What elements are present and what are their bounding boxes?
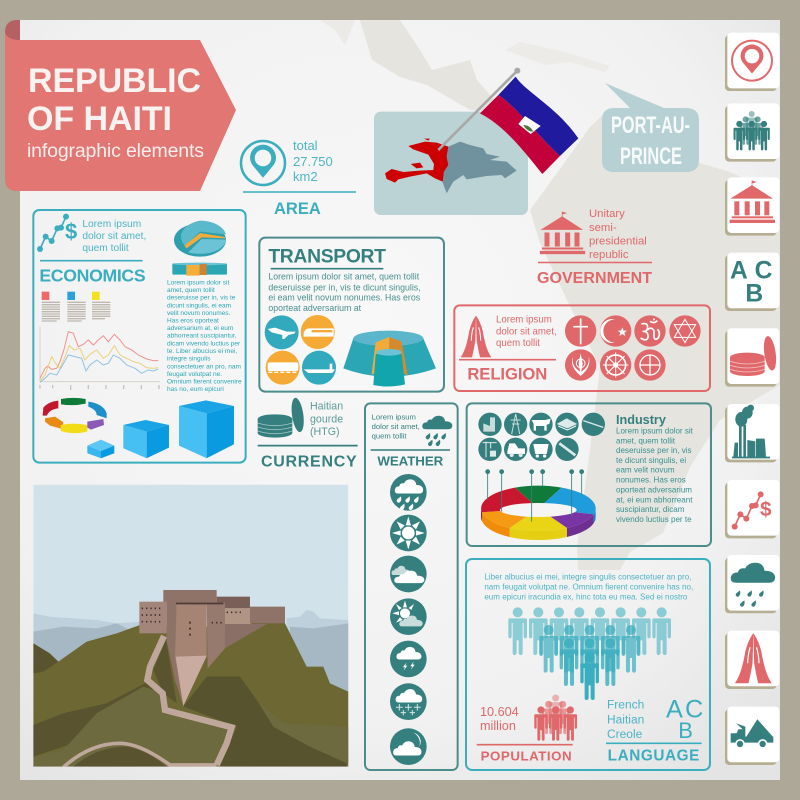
ribbon body bbox=[5, 32, 236, 191]
title ribbon bbox=[5, 20, 236, 191]
capital name: PORT-AU- bbox=[611, 112, 690, 139]
weather heading: WEATHER bbox=[377, 454, 444, 469]
weather intro text: Lorem ipsum bbox=[372, 412, 416, 421]
industry text: oporteat adversarium bbox=[616, 485, 692, 494]
ribbon curl bbox=[5, 20, 20, 48]
icon: cross bbox=[565, 315, 596, 347]
economics body text: deseruisse per in, vis te bbox=[167, 295, 236, 302]
icon: cloudy bbox=[390, 556, 427, 592]
tile: government bbox=[725, 177, 779, 236]
tile: religion bbox=[725, 631, 779, 689]
icon: crescent and star bbox=[600, 315, 631, 347]
economics heading: ECONOMICS bbox=[39, 266, 146, 286]
sidebar tiles, upper bbox=[725, 33, 779, 387]
icon: letters ABC: B bbox=[678, 718, 693, 743]
icon: tube bbox=[555, 438, 579, 461]
pie chart bbox=[174, 221, 226, 257]
icon: thunderstorm bbox=[390, 641, 427, 677]
icon: people group bbox=[534, 694, 577, 741]
government form: presidential bbox=[589, 236, 647, 248]
icon: loader bbox=[504, 438, 527, 461]
icon: plane bbox=[265, 315, 299, 349]
area value: total bbox=[293, 138, 318, 153]
cube chart bbox=[87, 400, 234, 458]
currency name: Haitian bbox=[310, 400, 343, 412]
population intro text: Liber albucius ei mei, integre singulis consectetuer an pro, bbox=[484, 572, 691, 581]
currency block bbox=[258, 397, 358, 471]
population intro text: eum epicuri iracundia ex, hinc tota eu mea. Sed ei nostro bbox=[484, 592, 688, 601]
population value: 10.604 bbox=[480, 705, 519, 719]
religion intro text: dolor sit amet, bbox=[496, 327, 557, 338]
languages: Creole bbox=[607, 727, 643, 741]
population heading: POPULATION bbox=[481, 749, 572, 764]
capital callout bbox=[602, 83, 699, 172]
transport text: ei eam velit novum nonumes. Has eros bbox=[268, 293, 421, 303]
landmark illustration: Citadelle Laferriere bbox=[33, 485, 348, 767]
economics body text: dicam vivendo luctius per bbox=[167, 340, 241, 347]
panel: weather bbox=[365, 403, 458, 770]
industry text: te dicunt singulis, ei bbox=[616, 456, 686, 465]
icon: rain cloud bbox=[422, 416, 452, 446]
currency name: gourde bbox=[310, 413, 343, 425]
ring chart bbox=[43, 398, 107, 433]
economics body text: has no, eum epicuri bbox=[167, 386, 224, 393]
panel: economics bbox=[33, 210, 246, 463]
ring chart bbox=[481, 486, 596, 540]
icon: sun bbox=[390, 515, 427, 551]
government heading: GOVERNMENT bbox=[537, 270, 652, 287]
title ribbon: OF HAITI bbox=[27, 100, 172, 138]
cylinder chart bbox=[172, 263, 227, 276]
transport text: oporteat adversarium at bbox=[268, 303, 362, 313]
economics body text: velit novum nonumes. bbox=[167, 310, 231, 317]
icon: star of David bbox=[669, 315, 701, 347]
population value: million bbox=[480, 719, 516, 733]
transport text: deseruisse per in, vis te dicunt singulis, bbox=[268, 282, 421, 292]
languages: Haitian bbox=[607, 712, 644, 726]
icon: coins bbox=[258, 397, 306, 438]
transport text: Lorem ipsum dolor sit amet, quem tollit bbox=[268, 272, 420, 282]
tile: language: C bbox=[755, 258, 773, 285]
tile: area bbox=[725, 33, 779, 91]
people pictogram bbox=[508, 607, 671, 700]
economics intro text: quem tollit bbox=[82, 243, 129, 254]
panel: industry bbox=[467, 403, 711, 546]
flagpole bbox=[438, 68, 520, 150]
economics body text: adversarium at, ei eum bbox=[167, 325, 233, 332]
chart legend bbox=[42, 292, 110, 321]
economics body text: te. Liber albucius ei mei, bbox=[167, 348, 237, 355]
line chart bbox=[40, 327, 160, 390]
tile: currency bbox=[725, 328, 779, 387]
chart pins bbox=[486, 470, 584, 522]
government block bbox=[537, 208, 652, 287]
icon: train bbox=[266, 351, 300, 385]
tile: language: A bbox=[730, 258, 748, 285]
icon: fabric bbox=[555, 413, 579, 436]
icon: ship bbox=[302, 351, 336, 385]
industry text: suscipiantur, dicam bbox=[616, 505, 685, 514]
tile: industry bbox=[725, 404, 779, 462]
currency name: (HTG) bbox=[310, 426, 340, 438]
area heading: AREA bbox=[274, 200, 321, 218]
tile: transport bbox=[725, 707, 779, 765]
transport heading: TRANSPORT bbox=[268, 247, 386, 268]
currency heading: CURRENCY bbox=[261, 454, 357, 471]
economics body text: feugait volutpat ne. bbox=[167, 371, 222, 378]
religion intro text: Lorem ipsum bbox=[496, 314, 552, 325]
religion intro text: quem tollit bbox=[496, 338, 540, 349]
icon: snow bbox=[390, 683, 427, 720]
economics body text: Omnium fierent convenire bbox=[167, 379, 242, 386]
icon: khanda bbox=[565, 349, 596, 381]
icon: sun behind cloud bbox=[390, 598, 427, 635]
map: Haiti bbox=[385, 139, 448, 183]
industry text: at, ei eum abhorreant bbox=[616, 495, 693, 504]
area value: km2 bbox=[293, 169, 318, 184]
industry text: Lorem ipsum dolor sit bbox=[616, 427, 694, 436]
icon: praying hands bbox=[461, 316, 491, 357]
tile: language: B bbox=[745, 281, 763, 308]
population intro text: nam feugait volutpat ne. Omnium fierent convenire has no, bbox=[484, 583, 693, 592]
icon: cow bbox=[529, 413, 553, 436]
economics body text: consectetuer an pro, nam bbox=[167, 363, 241, 370]
tile: economics: $ bbox=[760, 498, 772, 521]
sidebar tiles, lower bbox=[725, 404, 779, 765]
industry text: deseruisse per in, vis bbox=[616, 446, 692, 455]
flag of Haiti bbox=[480, 77, 578, 174]
industry text: amet, quem tollit bbox=[616, 436, 676, 445]
map panel bbox=[374, 112, 528, 215]
panel: religion bbox=[454, 305, 710, 391]
economics body text: amet, quem tollit bbox=[167, 287, 215, 294]
industry text: eam velit novum bbox=[616, 466, 675, 475]
icon: tool bbox=[582, 413, 605, 436]
subtitle: infographic elements bbox=[27, 140, 204, 162]
weather intro text: quem tollit bbox=[372, 432, 407, 441]
tile: language bbox=[725, 253, 779, 311]
government form: Unitary bbox=[589, 208, 625, 220]
area block bbox=[241, 138, 356, 218]
cylinder chart bbox=[343, 331, 436, 386]
icon: night cloud bbox=[390, 728, 427, 765]
language heading: LANGUAGE bbox=[608, 748, 699, 765]
weather intro text: dolor sit amet, bbox=[372, 422, 420, 431]
industry text: nonumes. Has eros bbox=[616, 476, 686, 485]
tile: weather bbox=[725, 555, 779, 613]
icon: growth chart with dollar bbox=[37, 214, 77, 252]
icon: letters ABC: C bbox=[685, 695, 703, 723]
languages: French bbox=[607, 697, 644, 711]
icon: om bbox=[634, 315, 666, 347]
icon: circle cross bbox=[634, 349, 666, 381]
economics body text: integre singulis bbox=[167, 356, 211, 363]
economics body text: dicunt singulis, ei eam bbox=[167, 302, 231, 309]
icon: rain bbox=[390, 474, 427, 511]
icon: mine cart bbox=[529, 438, 553, 461]
panel: population and language bbox=[466, 559, 710, 770]
economics intro text: Lorem ipsum bbox=[82, 219, 141, 230]
title text: REPUBLIC bbox=[28, 62, 201, 100]
world map silhouette bbox=[320, 20, 780, 570]
economics body text: Has eros oporteat bbox=[167, 318, 219, 325]
economics body text: Lorem ipsum dolor sit bbox=[167, 279, 229, 286]
religion heading: RELIGION bbox=[467, 364, 547, 383]
capital name: PRINCE bbox=[620, 143, 682, 170]
panel: transport bbox=[259, 238, 444, 392]
government form: republic bbox=[589, 249, 629, 261]
area value: 27.750 bbox=[293, 154, 333, 169]
icon: government building bbox=[540, 212, 585, 254]
industry text: vivendo luctius per te bbox=[616, 515, 692, 524]
government form: semi- bbox=[589, 222, 617, 234]
icon: growth chart with dollar: $ bbox=[65, 219, 77, 244]
map: Dominican Republic bbox=[442, 142, 517, 193]
icon: letters ABC: A bbox=[666, 695, 683, 723]
icon: pylon bbox=[504, 413, 527, 436]
icon: dharma wheel bbox=[600, 349, 631, 381]
industry heading: Industry bbox=[616, 413, 666, 427]
icon: bus bbox=[301, 315, 335, 349]
icon: area pin bbox=[241, 141, 285, 185]
economics body text: abhorreant suscipiantur, bbox=[167, 333, 237, 340]
icon: crane bbox=[478, 438, 502, 461]
economics intro text: dolor sit amet, bbox=[82, 231, 146, 242]
icon: factory bbox=[478, 413, 502, 436]
tile: economics bbox=[725, 480, 779, 538]
map and flag bbox=[374, 68, 578, 215]
tile: population bbox=[725, 103, 779, 162]
